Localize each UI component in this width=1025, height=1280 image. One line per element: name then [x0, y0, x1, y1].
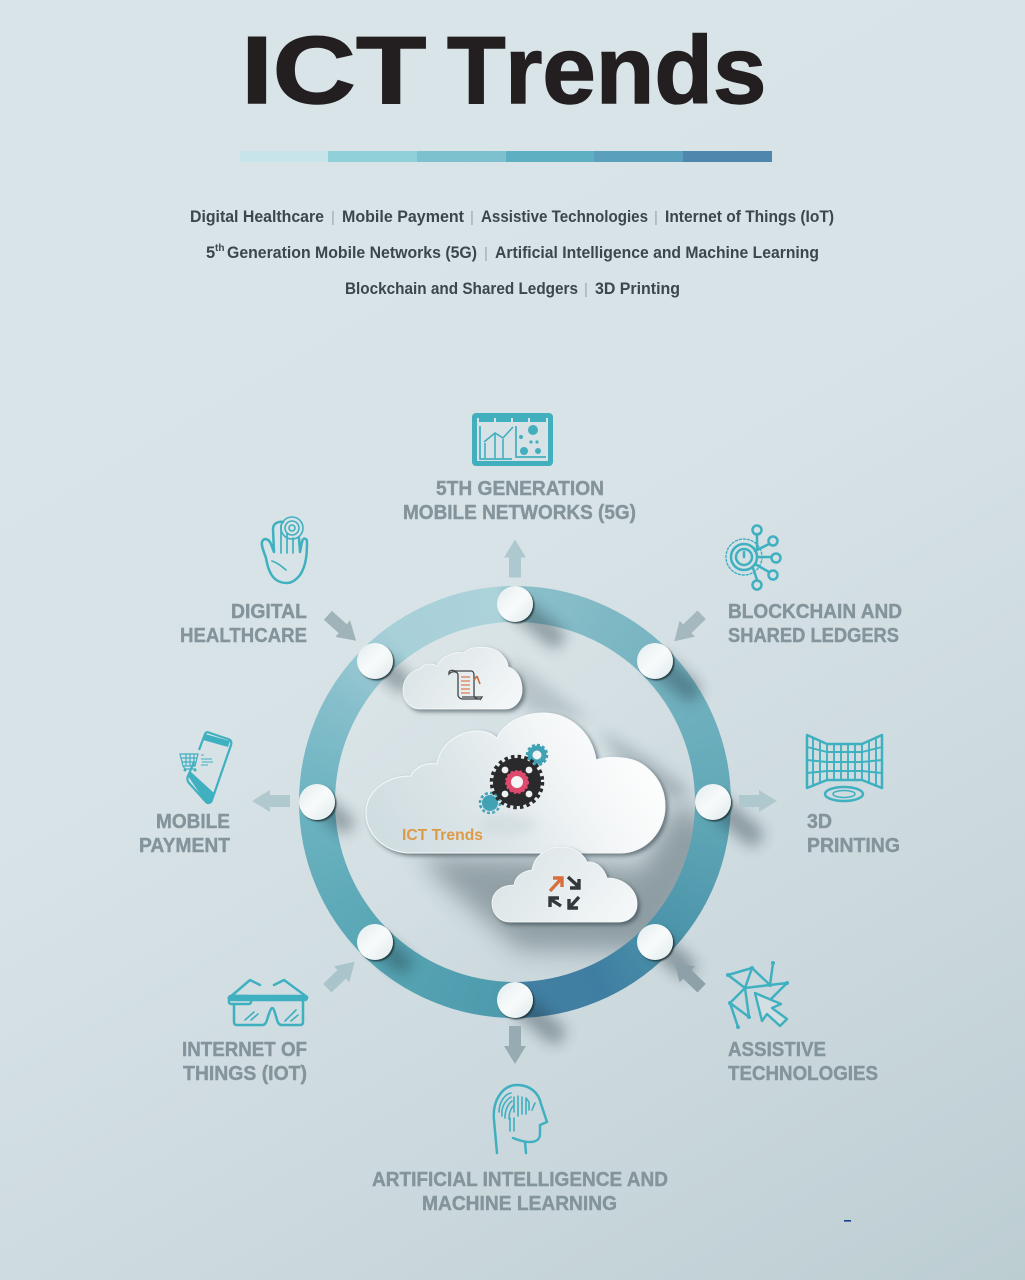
arrow: digital healthcare: [321, 607, 363, 649]
subtitle list of trends: Generation Mobile Networks (5G): [227, 244, 477, 262]
cloud cast shadows on disc: [420, 660, 720, 950]
main infographic canvas: [140, 32, 902, 1222]
icon: 3D printing grid: [807, 735, 882, 801]
node: assistive technologies: [637, 924, 673, 960]
arrow: 5G: [504, 540, 526, 578]
gear reflection: [480, 814, 536, 836]
title: [241, 17, 766, 124]
label: blockchain: SHARED LEDGERS: [728, 625, 899, 647]
label: assistive technologies: [728, 1039, 878, 1085]
arrow: mobile payment: [252, 790, 290, 812]
cloud label: ICT Trends: [402, 827, 483, 844]
title colour bar: [240, 151, 772, 162]
label: mobile payment: MOBILE: [156, 811, 230, 833]
subtitle list of trends: Artificial Intelligence and Machine Learning: [495, 244, 819, 262]
label: 3D printing: 3D: [807, 811, 832, 833]
arrow: blockchain: [667, 607, 709, 649]
node: internet of things: [357, 924, 393, 960]
node: digital healthcare: [357, 643, 393, 679]
node: 3D printing: [695, 784, 731, 820]
arrow: internet of things: [320, 954, 362, 996]
cloud: central ICT Trends: [366, 713, 665, 853]
label: 3D printing: [807, 811, 900, 857]
icon: phone with shopping cart: [180, 732, 231, 803]
icon: dashboard for 5G: [472, 413, 553, 466]
subtitle list of trends: Assistive Technologies: [481, 208, 648, 226]
node shadows on ring: [311, 596, 768, 1048]
arrow: 3D printing: [739, 790, 777, 812]
icon: gears: [480, 745, 547, 813]
cloud: small top with document: [403, 647, 522, 709]
label: digital healthcare: DIGITAL: [231, 601, 307, 623]
node: blockchain: [637, 643, 673, 679]
label: digital healthcare: HEALTHCARE: [180, 625, 307, 647]
label: 3D printing: PRINTING: [807, 835, 900, 857]
label: mobile payment: PAYMENT: [139, 835, 230, 857]
label: blockchain: [728, 601, 902, 647]
small dash mark: [844, 1220, 851, 1222]
subtitle list of trends: th: [215, 243, 224, 254]
node: artificial intelligence: [497, 982, 533, 1018]
cloud: small bottom with arrows: [492, 847, 637, 922]
label: internet of things: THINGS (IOT): [183, 1063, 307, 1085]
icon: smart glasses: [229, 980, 307, 1025]
subtitle list of trends: 3D Printing: [595, 280, 680, 298]
label: 5G: 5TH GENERATION: [436, 478, 604, 500]
label: 5G: [403, 478, 636, 524]
subtitle list of trends: |: [331, 209, 335, 226]
arrow: artificial intelligence: [504, 1026, 526, 1064]
arrow: assistive technologies: [667, 954, 709, 996]
label: assistive technologies: ASSISTIVE: [728, 1039, 826, 1061]
icon: scroll document: [449, 670, 482, 700]
label: 5G: MOBILE NETWORKS (5G): [403, 502, 636, 524]
title: Trends: [447, 17, 766, 124]
label: artificial intelligence: ARTIFICIAL INTELLIGENCE AND: [372, 1169, 668, 1191]
subtitle list of trends: |: [470, 209, 474, 226]
subtitle list of trends: [190, 208, 834, 298]
subtitle list of trends: |: [584, 281, 588, 298]
label: internet of things: INTERNET OF: [182, 1039, 307, 1061]
node: mobile payment: [299, 784, 335, 820]
label: artificial intelligence: [372, 1169, 668, 1215]
icon: hand with touch rings: [262, 517, 307, 583]
title: ICT: [241, 17, 426, 124]
subtitle list of trends: Internet of Things (IoT): [665, 208, 834, 226]
label: artificial intelligence: MACHINE LEARNING: [422, 1193, 617, 1215]
subtitle list of trends: |: [484, 245, 488, 262]
icon: cycle arrows: [550, 877, 579, 908]
label: internet of things: [182, 1039, 307, 1085]
label: digital healthcare: [180, 601, 307, 647]
subtitle list of trends: |: [654, 209, 658, 226]
label: blockchain: BLOCKCHAIN AND: [728, 601, 902, 623]
subtitle list of trends: Blockchain and Shared Ledgers: [345, 280, 578, 298]
label: mobile payment: [139, 811, 230, 857]
subtitle list of trends: 5: [206, 244, 215, 262]
ring: circular timeline band: [299, 586, 731, 1018]
inner disc of ring: [335, 622, 695, 982]
label: assistive technologies: TECHNOLOGIES: [728, 1063, 878, 1085]
icon: AI head with circuit brain: [494, 1085, 547, 1153]
node: 5G: [497, 586, 533, 622]
icon: network with cursor: [726, 961, 789, 1029]
subtitle list of trends: Digital Healthcare: [190, 208, 324, 226]
subtitle list of trends: Mobile Payment: [342, 208, 464, 226]
icon: blockchain network power node: [726, 526, 780, 590]
